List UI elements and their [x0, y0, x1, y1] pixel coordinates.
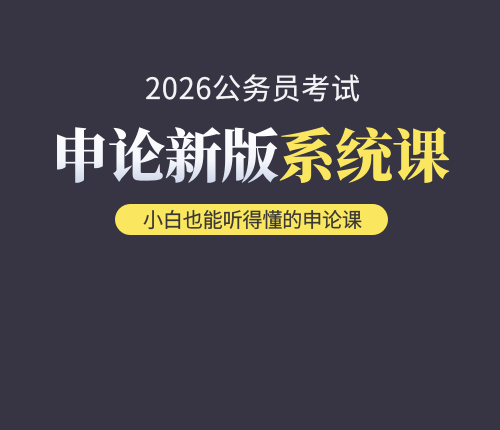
title: yellow part: 系统课 — [278, 125, 450, 190]
pill text: 小白也能听得懂的申论课 — [143, 204, 362, 233]
title: white part: 申论新版 — [51, 125, 279, 190]
tagline pill — [115, 204, 388, 235]
pill background — [115, 204, 388, 235]
subtitle: 2026公务员考试 — [145, 66, 360, 108]
main title — [51, 125, 450, 190]
